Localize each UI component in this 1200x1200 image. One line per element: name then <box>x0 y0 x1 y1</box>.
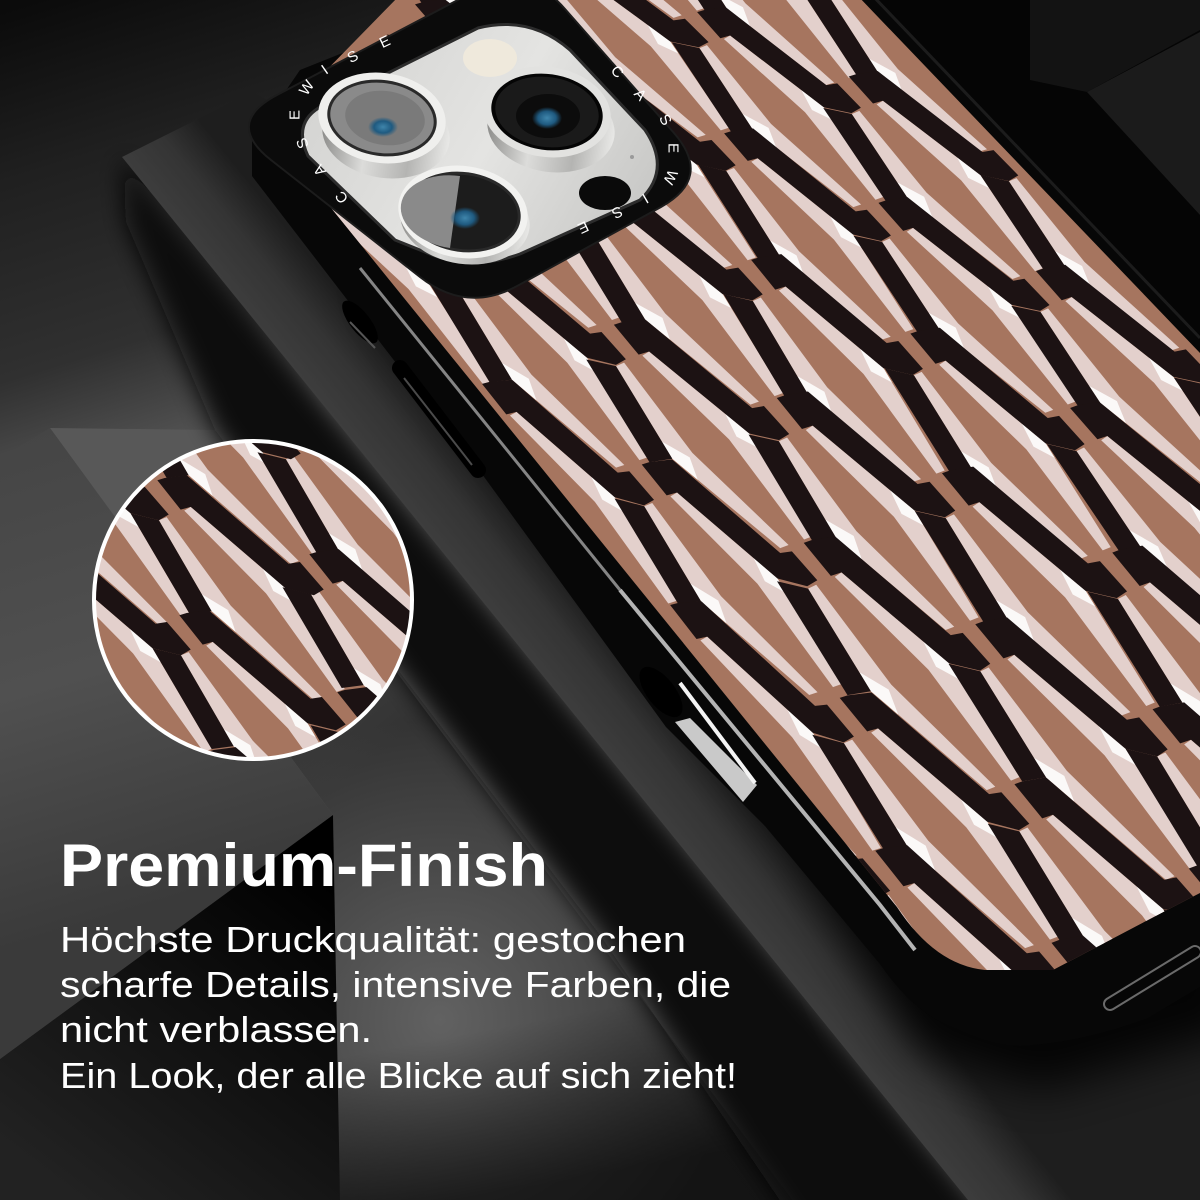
brand text ring: W <box>296 77 319 99</box>
flash <box>463 39 517 77</box>
background: upper right block front <box>1030 0 1200 92</box>
camera bump <box>249 0 691 298</box>
brand text ring: S <box>293 135 313 151</box>
heading: Premium-Finish <box>60 832 548 899</box>
case rim highlight upper <box>360 268 620 590</box>
case rim highlight lower <box>620 590 915 950</box>
button: volume <box>400 368 478 470</box>
magnifier ring <box>94 441 412 759</box>
brand text ring <box>286 32 682 237</box>
pattern: black lattice <box>387 0 1200 970</box>
charging port <box>1110 952 1195 1004</box>
background: lower wall <box>50 428 800 1200</box>
background: lower block top <box>0 428 333 1059</box>
case rim top right <box>872 0 1200 338</box>
body text: nicht verblassen. <box>60 1009 372 1050</box>
lidar and microphone <box>579 155 634 210</box>
brand text ring: S <box>345 47 361 67</box>
background: lower wall glow <box>50 428 800 1200</box>
phone pattern panel <box>330 0 1200 970</box>
pattern: pink strips and white highlights <box>267 0 1200 1200</box>
brand text ring: C <box>332 187 352 207</box>
brand text ring: E <box>575 217 591 237</box>
body text: Höchste Druckqualität: gestochen <box>60 919 686 960</box>
button: power silver <box>631 660 757 802</box>
lens: bottom <box>392 157 535 273</box>
camera bump outer frame <box>249 0 691 298</box>
phone case body <box>252 0 1200 1046</box>
phone shadow <box>370 280 1200 1090</box>
background: upper right corner <box>860 0 1200 360</box>
lens: upper right <box>477 59 621 180</box>
brand text ring: W <box>659 167 681 188</box>
brand text ring: C <box>607 62 627 82</box>
brand text ring: I <box>639 190 651 206</box>
brand text ring: I <box>318 62 332 78</box>
brand text ring: S <box>609 202 625 222</box>
background: lower wall bottom shading <box>333 1000 900 1200</box>
background: lower block front <box>0 815 340 1200</box>
body text: Ein Look, der alle Blicke auf sich zieht! <box>60 1055 737 1096</box>
brand text ring: E <box>377 32 393 52</box>
body text <box>60 919 737 1096</box>
background: upper right block side <box>1087 32 1200 215</box>
camera glass plate <box>302 24 657 263</box>
brand text ring: A <box>310 161 330 179</box>
body text: scharfe Details, intensive Farben, die <box>60 964 731 1005</box>
magnifier circle: pattern detail <box>92 439 414 761</box>
brand text ring: E <box>664 143 682 153</box>
brand text ring: E <box>286 110 304 120</box>
brand text ring: A <box>630 86 650 104</box>
background: slab side dark band <box>122 157 1000 1200</box>
lens: upper left <box>312 65 456 186</box>
button: action <box>336 295 384 349</box>
brand text ring: S <box>655 111 675 129</box>
